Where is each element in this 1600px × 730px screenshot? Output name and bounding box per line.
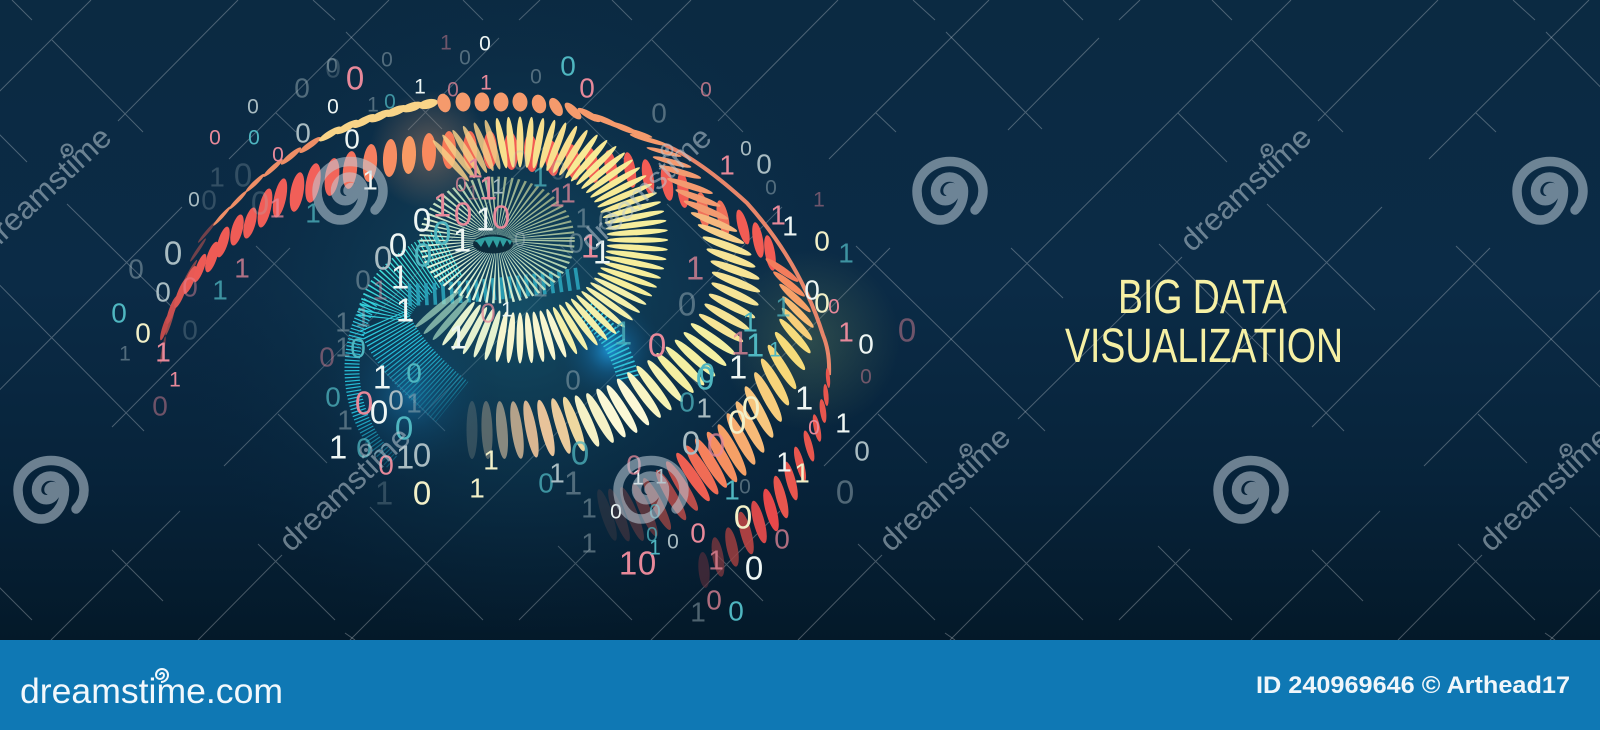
watermark wordmarks	[0, 119, 1600, 558]
pink digits: 1	[467, 152, 483, 184]
cream digits: 0	[728, 404, 746, 440]
faint pink digits: 0	[152, 390, 168, 422]
teal dome hatch	[352, 252, 628, 462]
gray digits: 1	[549, 458, 565, 488]
cream digits: 0	[413, 474, 431, 512]
inner yellow band	[413, 116, 668, 364]
gray digits: 0	[188, 188, 200, 212]
pink digits: 0	[355, 384, 373, 422]
dim gray digits: 0	[565, 364, 581, 396]
teal digits: 0	[395, 410, 413, 446]
dim gray digits: 1	[564, 464, 582, 502]
pink digits: 0	[828, 296, 840, 318]
faint gray digits: 0	[234, 156, 252, 194]
dim teal digits: 1	[775, 292, 791, 322]
dim gray digits: 1	[335, 306, 351, 338]
dim gray digits: 1	[581, 528, 597, 558]
white digits: 1	[729, 348, 747, 386]
outer yellow band	[466, 146, 762, 459]
dim teal digits: 1	[838, 238, 854, 268]
cream digits	[135, 226, 830, 536]
dim gray digits: 0	[128, 254, 144, 284]
pink digits: 1	[155, 336, 171, 368]
dim pink digits: 0	[626, 450, 642, 480]
pink digits: 1	[719, 150, 735, 180]
dim pink digits: 1	[731, 324, 749, 362]
pink digits: 1	[433, 186, 451, 224]
gray digits: 1	[655, 466, 667, 488]
dim pink digits	[234, 78, 790, 616]
gray digits: 0	[682, 424, 700, 462]
watermark spirals	[18, 162, 1583, 519]
dim gray digits: 0	[514, 228, 526, 252]
white digits: 1	[795, 380, 813, 416]
faint gray digits: 0	[550, 154, 566, 186]
gray digits: 0	[155, 276, 171, 308]
spiral data sphere	[158, 92, 831, 588]
dim gray digits: 0	[326, 54, 338, 78]
cream digits: 0	[814, 226, 830, 256]
teal digits: 0	[560, 50, 576, 82]
pink digits: 1	[838, 316, 854, 348]
teal digits: 0	[111, 298, 127, 328]
dim gray digits: 0	[459, 46, 471, 70]
gray digits: 0	[854, 436, 870, 466]
dim teal digits: 0	[356, 432, 372, 464]
dim gray digits: 1	[532, 272, 548, 302]
white digits: 0	[858, 328, 874, 360]
white digits: 1	[396, 292, 414, 328]
dim gray digits: 1	[335, 332, 351, 362]
dim gray digits: 1	[337, 404, 353, 436]
dim teal digits: 0	[571, 434, 589, 472]
dim gray digits: 0	[530, 66, 542, 88]
gray digits: 0	[740, 138, 752, 160]
gray digits: 0	[295, 118, 311, 148]
dim gray digits: 0	[294, 72, 310, 104]
gray digits: 0	[413, 436, 431, 474]
teal digits: 0	[350, 332, 366, 364]
title	[1065, 271, 1343, 373]
teal digits: 1	[746, 326, 764, 364]
white digits: 1	[835, 408, 851, 438]
pink digits: 0	[209, 126, 221, 150]
pink digits: 0	[272, 144, 284, 166]
cream digits: 1	[794, 458, 810, 488]
faint pink digits: 0	[319, 342, 335, 372]
dim gray digits: 0	[678, 286, 696, 322]
dim pink digits: 0	[706, 584, 722, 616]
gray digits: 0	[667, 530, 679, 554]
white digits: 0	[344, 124, 360, 154]
white digits: 1	[453, 222, 471, 258]
white digits: 1	[449, 318, 467, 356]
outermost thin arc	[159, 92, 831, 588]
dim pink digits: 0	[707, 426, 725, 464]
gray digits: 0	[164, 234, 182, 272]
pink digits: 1	[770, 200, 786, 230]
gray digits: 1	[396, 438, 414, 476]
red ellipse row	[158, 131, 816, 543]
gray digits: 0	[388, 384, 404, 416]
cream digits: 1	[483, 444, 499, 476]
white digits: 1	[501, 298, 513, 322]
white digits: 0	[389, 226, 407, 264]
gray digits: 1	[492, 176, 504, 198]
dim pink digits: 0	[455, 174, 467, 196]
pink digits: 1	[169, 368, 181, 392]
teal digits: 0	[414, 236, 432, 274]
gray digits: 0	[374, 240, 392, 276]
faint pink digits: 0	[898, 312, 916, 348]
dim pink digits: 0	[700, 78, 712, 102]
faint pink digits: 0	[182, 272, 198, 302]
white digits	[327, 32, 874, 586]
white digits: 1	[414, 76, 426, 98]
footer image id and credit: ID 240969646 © Arthead17	[1256, 672, 1570, 699]
pink digits: 0	[492, 198, 510, 236]
dim gray digits: 0	[836, 474, 854, 510]
footer band	[0, 640, 1600, 730]
teal digits	[111, 50, 781, 626]
dim teal digits: 1	[305, 198, 321, 228]
white digits: 1	[593, 234, 611, 270]
dim teal digits	[212, 90, 854, 546]
faint pink digits: 1	[440, 32, 452, 54]
dim teal digits: 0	[649, 500, 661, 524]
dim gray digits: 0	[355, 264, 371, 296]
white digits: 1	[782, 210, 798, 242]
teal digits: 0	[406, 358, 422, 388]
faint pink digits: 1	[467, 182, 479, 204]
dim gray digits	[119, 46, 854, 628]
scattered binary digits	[111, 32, 916, 628]
dim gray digits: 1	[690, 596, 706, 628]
dim pink digits: 1	[560, 178, 576, 208]
dim pink digits: 0	[447, 78, 459, 102]
faint gray digits: 0	[325, 52, 341, 84]
central radial burst	[458, 208, 536, 272]
dim gray digits: 1	[581, 492, 597, 524]
dim pink digits: 0	[774, 524, 790, 554]
white digits: 1	[373, 358, 391, 396]
dim gray digits: 0	[651, 98, 667, 128]
faint gray digits: 0	[512, 144, 528, 176]
pink digits: 0	[638, 544, 656, 582]
cream digits: 0	[814, 288, 830, 318]
dim gray digits: 1	[367, 94, 379, 116]
white digits: 1	[632, 466, 644, 490]
gray digits	[155, 96, 870, 554]
faint gray digits	[182, 52, 566, 512]
faint gray digits: 0	[251, 184, 269, 222]
faint pink digits: 0	[860, 366, 872, 388]
dim teal digits: 1	[532, 162, 548, 192]
teal digits: 0	[699, 358, 715, 388]
footer logo: dreamstime.com	[20, 672, 283, 711]
dim gray digits: 0	[381, 48, 393, 72]
background glows	[180, 0, 900, 650]
white digits: 0	[413, 202, 431, 238]
white digits: 1	[391, 258, 409, 296]
pink digits: 1	[581, 228, 599, 264]
teal digits: 0	[728, 596, 744, 626]
dim gray digits: 0	[765, 176, 777, 200]
teal digits: 0	[248, 126, 260, 150]
dim pink digits: 1	[234, 252, 250, 284]
dim pink digits: 0	[480, 298, 496, 328]
teal digits: 0	[696, 360, 714, 396]
faint gray digits: 0	[182, 314, 198, 346]
white digits: 0	[479, 32, 491, 56]
dim gray digits: 1	[406, 388, 422, 418]
white digits: 0	[327, 96, 339, 118]
dim gray digits: 0	[739, 476, 751, 498]
dim gray digits: 0	[598, 204, 614, 236]
teal digits: 1	[742, 306, 758, 338]
cream digits: 0	[742, 390, 760, 426]
faint gray digits: 1	[209, 162, 225, 192]
cream digits: 0	[734, 498, 752, 536]
dim pink digits: 1	[686, 250, 704, 286]
white digits: 1	[329, 428, 347, 466]
title: VISUALIZATION	[1065, 320, 1343, 373]
faint gray digits: 0	[201, 184, 217, 216]
faint gray digits: 1	[375, 474, 393, 512]
pink digits: 1	[480, 72, 492, 94]
pink digits: 0	[346, 60, 364, 96]
teal digits: 1	[649, 536, 661, 560]
teal digits: 0	[433, 214, 451, 252]
gray digits: 0	[756, 148, 772, 180]
pink digits: 1	[619, 544, 637, 582]
dim pink digits: 1	[549, 182, 565, 212]
dim teal digits: 1	[614, 314, 632, 352]
faint pink digits: 1	[813, 188, 825, 212]
pink digits: 0	[579, 72, 595, 104]
faint pink digits	[152, 32, 916, 422]
dim teal digits: 0	[325, 382, 341, 412]
gray digits: 1	[696, 392, 712, 424]
pink digits: 0	[808, 416, 820, 440]
white digits: 1	[476, 200, 494, 238]
white digits: 1	[776, 446, 792, 478]
white digits: 0	[804, 274, 820, 306]
dark eye of the spiral	[473, 234, 513, 254]
dim gray digits: 1	[575, 202, 591, 234]
pink digits	[155, 60, 854, 582]
pink digits: 0	[454, 196, 472, 232]
white digits: 1	[362, 164, 378, 196]
dim teal digits: 0	[646, 524, 658, 546]
dim teal digits: 0	[679, 386, 695, 418]
title: BIG DATA	[1118, 271, 1287, 324]
cream digits: 0	[135, 318, 151, 348]
teal digits: 1	[769, 338, 781, 362]
dim teal digits: 0	[384, 90, 396, 114]
dim gray digits: 0	[568, 228, 584, 258]
dim teal digits: 1	[212, 274, 228, 306]
white digits: 0	[745, 550, 763, 586]
teal digits: 1	[724, 474, 740, 506]
cream digits: 1	[469, 472, 485, 504]
pink digits: 0	[648, 326, 666, 364]
dim pink digits: 1	[269, 192, 285, 224]
dim gray digits: 1	[119, 342, 131, 366]
pink digits: 0	[690, 518, 706, 548]
dim pink digits: 1	[708, 544, 724, 576]
pink digits: 0	[378, 450, 394, 480]
dim gray digits: 1	[355, 302, 371, 332]
white digits: 0	[610, 500, 622, 524]
pink digits: 1	[479, 170, 497, 206]
gray digits: 0	[247, 96, 259, 118]
white digits: 0	[370, 394, 388, 430]
dim teal digits: 0	[538, 468, 554, 498]
faint pink digits: 1	[372, 274, 388, 306]
